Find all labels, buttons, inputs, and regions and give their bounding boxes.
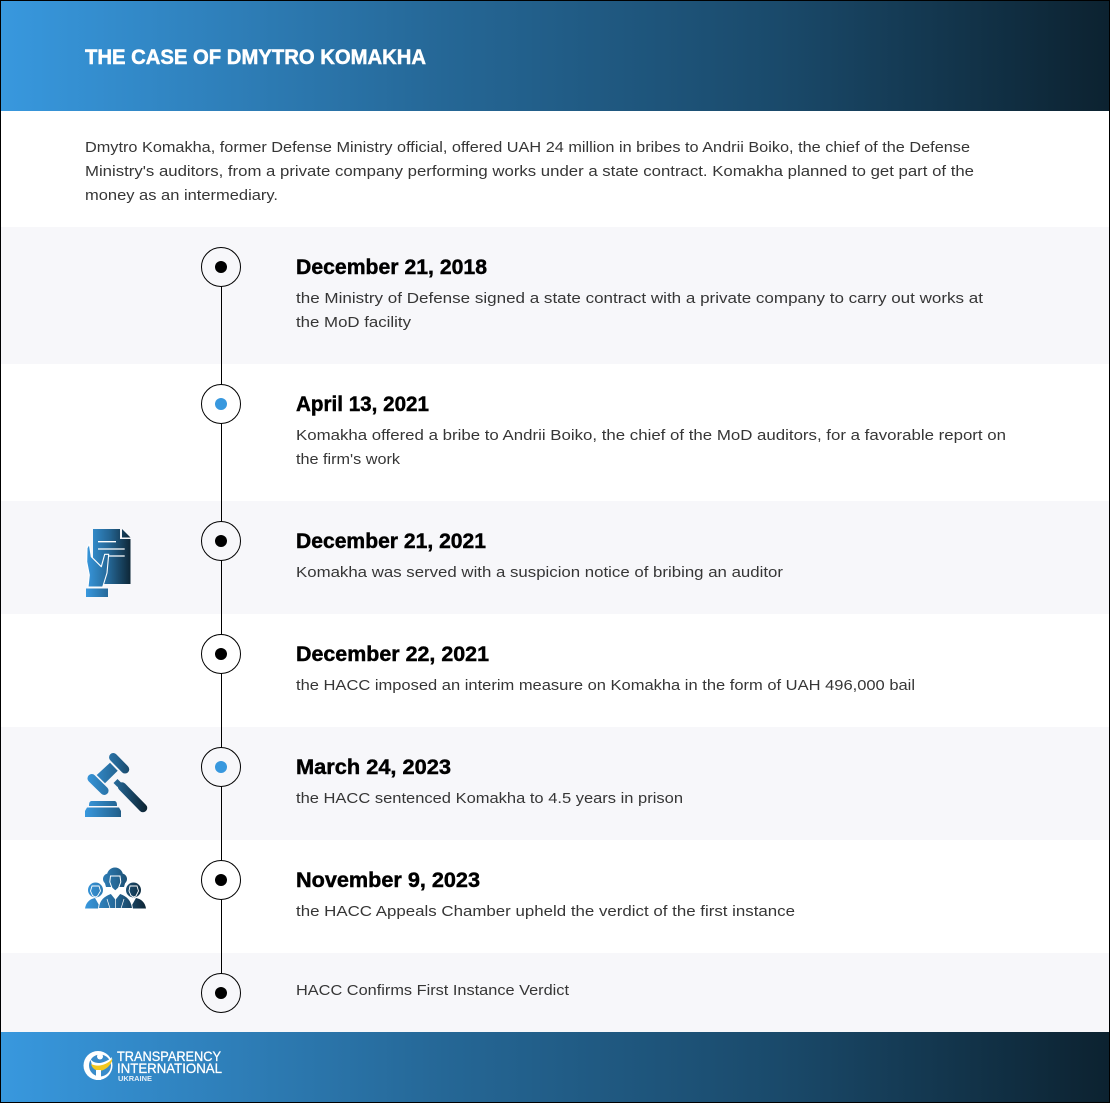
- event: December 21, 2021: [296, 530, 783, 581]
- event: November 9, 2023: the HACC Appeals Chamber upheld the verdict of the first instance: [296, 903, 795, 920]
- intro paragraph: Ministry's auditors, from a private company performing works under a state contract. Komakha planned to get part of the: [85, 163, 974, 180]
- event: December 22, 2021: [296, 643, 915, 694]
- intro paragraph: [85, 139, 974, 204]
- event: March 24, 2023: [296, 756, 683, 807]
- event: March 24, 2023: March 24, 2023: [296, 756, 451, 779]
- logo: Transparency International Ukraine: INTERNATIONAL: [117, 1060, 222, 1076]
- event: December 21, 2018: the MoD facility: [296, 314, 412, 331]
- event: April 13, 2021: the firm's work: [296, 451, 401, 468]
- event: December 21, 2021: December 21, 2021: [296, 530, 486, 553]
- event: March 24, 2023: the HACC sentenced Komakha to 4.5 years in prison: [296, 790, 683, 807]
- event: November 9, 2023: November 9, 2023: [296, 869, 480, 892]
- event: December 21, 2018: [296, 256, 984, 331]
- logo: Transparency International Ukraine: [84, 1048, 222, 1083]
- event: December 21, 2018: December 21, 2018: [296, 256, 487, 279]
- header band: [1, 1, 1109, 111]
- icon: hand holding document: [86, 529, 130, 597]
- event: November 9, 2023: [296, 869, 795, 920]
- row backgrounds: [1, 227, 1109, 1032]
- event: April 13, 2021: April 13, 2021: [296, 393, 429, 416]
- footer band: [1, 1032, 1109, 1102]
- title: THE CASE OF DMYTRO KOMAKHA: [85, 46, 426, 69]
- closing event text: HACC Confirms First Instance Verdict: [296, 982, 570, 999]
- icon: gavel: [85, 757, 143, 817]
- event: December 22, 2021: the HACC imposed an interim measure on Komakha in the form of UAH 496,000 bail: [296, 677, 915, 694]
- event: April 13, 2021: Komakha offered a bribe to Andrii Boiko, the chief of the MoD auditors, for a favorable report on: [296, 427, 1006, 444]
- intro paragraph: Dmytro Komakha, former Defense Ministry official, offered UAH 24 million in bribes to Andrii Boiko, the chief of the Defense: [85, 139, 970, 156]
- event: December 21, 2021: Komakha was served with a suspicion notice of bribing an auditor: [296, 564, 783, 581]
- timeline line and markers: [202, 248, 240, 1012]
- event: April 13, 2021: [296, 393, 1006, 468]
- logo: Transparency International Ukraine: UKRAINE: [118, 1076, 152, 1083]
- event: December 21, 2018: the Ministry of Defense signed a state contract with a private company to carry out works at: [296, 290, 984, 307]
- icon: panel of judges: [85, 868, 146, 908]
- logo: Transparency International Ukraine: TRANSPARENCY: [117, 1048, 222, 1064]
- intro paragraph: money as an intermediary.: [85, 187, 278, 204]
- event: December 22, 2021: December 22, 2021: [296, 643, 489, 666]
